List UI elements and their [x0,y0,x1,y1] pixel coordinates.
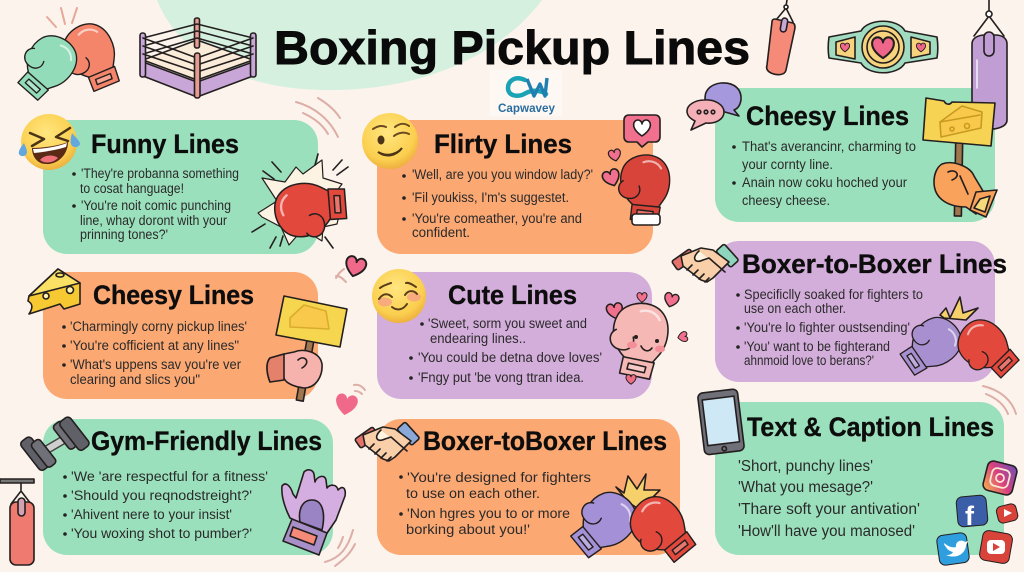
list: flirty lines: confident. [412,225,470,240]
list: text and caption lines: 'How'll have you manosed' [738,523,915,540]
heading: gym-friendly lines: Gym-Friendly Lines [91,426,322,456]
list: boxer-to-boxer lines middle: 'You're designed for fighters [407,470,591,485]
icon: sound waves and heart middle [336,255,368,282]
icon: boxing ring [140,18,256,98]
icon: handshake middle [355,422,420,461]
icon: handshake right [672,244,739,282]
icon: small video badge [995,503,1019,524]
icon: sound waves gym [325,530,355,566]
panel: cute lines [377,272,652,399]
list: cheesy lines left: 'What's uppens sav you're ver [70,357,241,372]
panel: text and caption lines [715,402,1004,555]
heading: text and caption lines: Text & Caption Lines [747,412,994,442]
heading: boxer-to-boxer lines middle: Boxer-toBoxer Lines [423,426,667,456]
list: boxer-to-boxer lines middle: to use on each other. [406,486,540,501]
heading: boxer-to-boxer lines right: Boxer-to-Boxer Lines [742,249,1007,279]
icon: punching glove with burst [252,154,352,248]
panel: flirty lines [377,120,653,254]
icon: large purple punching bag [972,0,1007,129]
icon: flirty hearts [601,148,622,188]
panel: boxer-to-boxer lines right [715,241,1007,382]
list: boxer-to-boxer lines right [736,287,923,368]
icon: sound waves near funny panel [296,98,340,137]
heading: cheesy lines top right: Cheesy Lines [746,101,909,131]
list: funny lines: prinning tones?' [80,227,168,242]
list: boxer-to-boxer lines right: use on each other. [744,301,846,316]
list: boxer-to-boxer lines right: Specificlly soaked for fighters to [744,287,923,302]
list: funny lines: to cosat hanguage! [80,181,184,196]
list: boxer-to-boxer lines middle [399,470,591,537]
list: boxer-to-boxer lines right: ahnmoid love to berans?' [744,353,874,368]
list: cheesy lines left [62,319,247,387]
icon: cute pink glove [606,300,671,384]
list: cheesy lines top right: cheesy cheese. [742,193,830,208]
list: cheesy lines left: 'Charmingly corny pickup lines' [70,319,247,334]
icon: heart lower left [334,385,365,417]
list: funny lines: 'You're noit comic punching [81,198,231,213]
icon: crossed boxing gloves [7,8,130,107]
heading: cheesy lines left: Cheesy Lines [93,280,254,310]
icon: dumbbell [19,416,91,472]
list: cheesy lines left: clearing and slics you" [70,372,200,387]
list: cute lines: endearing lines.. [430,331,526,346]
list: flirty lines [402,167,593,240]
icon: video badge [979,530,1013,564]
list: funny lines: line, whay doront with your [80,213,227,228]
heading: cute lines: Cute Lines [448,280,577,310]
icon: cheese sign with pink glove [267,296,347,401]
panel: boxer-to-boxer lines middle [377,419,680,555]
icon: clashing gloves middle [560,474,704,572]
icon: instagram [982,460,1018,496]
list: funny lines [72,166,239,242]
icon: red glove [619,155,670,225]
icon: clashing gloves right [891,297,1024,388]
icon: purple lifting glove [282,470,345,555]
panel: cheesy lines left [43,272,318,399]
list: gym-friendly lines: 'You woxing shot to pumber?' [71,526,252,541]
list: cute lines [409,316,602,385]
icon: blushing emoji [372,269,426,323]
icon: heart chat bubble [624,115,660,147]
list: gym-friendly lines [63,469,268,541]
list: flirty lines: 'Well, are you you window lady?' [412,167,593,182]
list: gym-friendly lines: 'Ahivent nere to your insist' [71,507,232,522]
logo: Capwavey [490,70,562,116]
list: boxer-to-boxer lines right: 'You're lo fighter oustsending' [744,320,910,335]
list: boxer-to-boxer lines middle: borking about you!' [406,522,530,537]
list: boxer-to-boxer lines middle: 'Non hgres you to or more [407,506,570,521]
list: cheesy lines top right: That's averancinr, charming to [742,139,916,154]
list: text and caption lines: 'Short, punchy lines' [738,458,873,475]
icon: cute hearts [606,292,688,343]
list: flirty lines: 'You're comeather, you're and [412,211,582,226]
panel: funny lines [43,120,318,254]
list: cute lines: 'You could be detna dove loves' [418,350,602,365]
icon: small punching bag [767,0,795,75]
list: flirty lines: 'Fil youkiss, I'm's suggestet. [412,190,569,205]
list: boxer-to-boxer lines right: 'You' want to be fighterand [744,339,890,354]
background blob [157,0,542,90]
list: cheesy lines top right: Anain now coku hoched your [742,175,907,190]
heading: funny lines: Funny Lines [91,129,239,159]
list: cheesy lines left: 'You're cofficient at any lines" [70,338,239,353]
list: cheesy lines top right: your cornty line. [742,157,833,172]
list: cheesy lines top right [732,139,916,208]
title: Boxing Pickup Lines [274,21,750,74]
icon: cheese wedge [28,269,80,314]
icon: twitter [936,532,970,566]
icon: championship belt [828,21,938,73]
icon: cheese sign with orange glove [923,98,997,217]
heading: flirty lines: Flirty Lines [434,129,572,159]
list: gym-friendly lines: 'Should you reqnodstreight?' [71,488,252,503]
icon: facebook: f [965,501,975,531]
list: cute lines: 'Fngy put 'be vong ttran idea. [418,370,584,385]
list: gym-friendly lines: 'We 'are respectful for a fitness' [71,469,268,484]
list: text and caption lines [738,458,920,540]
list: text and caption lines: 'Thare soft your antivation' [738,501,920,518]
icon: hanging punching bag [0,479,34,565]
icon: smartphone [697,389,745,455]
logo: Capwavey: Capwavey [498,103,556,115]
icon: sound waves right [983,386,1016,414]
list: cute lines: 'Sweet, sorm you sweet and [428,316,587,331]
icon: laughing emoji [19,114,80,170]
icon: facebook [956,495,988,531]
icon: winking emoji [362,113,418,169]
panel: cheesy lines top right [715,88,995,222]
list: funny lines: 'They're probanna something [81,166,239,181]
panel: gym-friendly lines [43,419,333,555]
list: text and caption lines: 'What you mesage?' [738,479,873,496]
icon: speech bubbles [687,83,741,130]
